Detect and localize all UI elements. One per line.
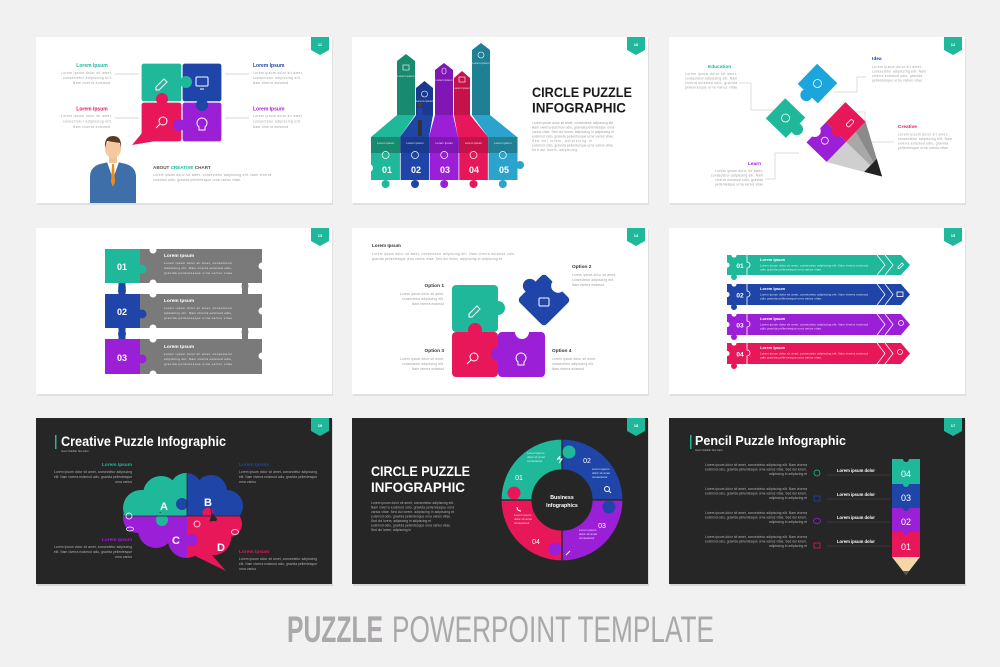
title: Creative Puzzle Infographic: [61, 433, 226, 449]
left labels: Lorem ipsum dolor sit amet,: [61, 71, 112, 75]
arrow rows: odio gravida pellentesque urna varius vitae.: [760, 268, 822, 272]
title: Insert Subtitle Text Here: [61, 449, 89, 453]
slide 3: pencil puzzle: [669, 37, 966, 205]
left labels: Lorem ipsum dolor sit amet,: [61, 114, 112, 118]
pencil: 04: [901, 469, 911, 479]
slide 8: circle puzzle (dark): 18: [634, 423, 639, 428]
arrow rows: 04: [736, 352, 744, 358]
items: euismod odio, gravida pellentesque urna varius vitae. Sed dui lorem,: [705, 516, 807, 520]
labels: [54, 462, 317, 571]
labels: Lorem Ipsum: [102, 537, 132, 543]
title: Insert Subtitle Text Here: [695, 448, 723, 452]
title text: Sed dui lorem, adipiscing in: [532, 139, 592, 143]
right labels: consectetur adipiscing elit.: [253, 120, 301, 124]
items: Lorem ipsum dolor sit amet, consectetur adipiscing elit. Nam viverra: [705, 511, 807, 515]
slide 5: four options puzzle: 14: [634, 233, 639, 238]
numbered puzzle tiles: Lorem ipsum: [436, 141, 453, 145]
slide 6: arrow rows: [669, 228, 966, 396]
ring: consectetur: [579, 536, 595, 540]
ring: consectetur: [527, 459, 543, 463]
ring: 04: [532, 539, 540, 546]
title text: Lorem ipsum dolor sit amet, consectetur adipiscing elit.: [532, 121, 614, 125]
labels: elit. Nam viverra euismod odio, gravida pellentesque: [239, 475, 317, 479]
arrow rows: odio gravida pellentesque urna varius vitae.: [760, 326, 822, 330]
labels: Lorem ipsum dolor sit amet,: [715, 169, 763, 173]
labels: Learn: [748, 161, 761, 167]
arrow columns: [371, 43, 517, 137]
rows: adipiscing elit. Nam viverra euismod odio,: [164, 311, 232, 315]
ring: Lorem ipsum: [527, 451, 545, 455]
header text: Lorem ipsum dolor sit amet, consectetur adipiscing elit. Nam viverra euismod odio,: [372, 252, 515, 256]
rows: 03: [117, 353, 127, 363]
slide 1: square puzzle with person: 11: [318, 42, 323, 47]
title text: INFOGRAPHIC: [532, 100, 626, 116]
slide 4: stacked puzzle rows: [36, 228, 333, 396]
rows: Lorem ipsum dolor sit amet, consectetur: [164, 352, 232, 356]
option labels: Nam viverra euismod: [552, 367, 584, 371]
items: adipiscing in adipiscing et: [769, 544, 807, 548]
right labels: Lorem Ipsum: [253, 63, 285, 69]
items: Lorem ipsum dolor: [837, 468, 875, 473]
header text: [372, 243, 515, 261]
items: Lorem ipsum dolor: [837, 539, 875, 544]
option labels: Lorem ipsum dolor sit amet,: [572, 273, 616, 277]
puzzle pieces: [452, 262, 577, 377]
ring: dolor sit amet: [527, 455, 545, 459]
option labels: Lorem ipsum dolor sit amet,: [552, 357, 596, 361]
labels: consectetur adipiscing elit. Nam: [711, 174, 763, 178]
ring: Infographics: [546, 503, 578, 509]
option labels: Lorem ipsum dolor sit amet,: [400, 292, 444, 296]
ring: 03: [598, 523, 606, 530]
ring: consectetur: [514, 521, 530, 525]
option labels: consectetur adipiscing elit.: [402, 362, 444, 366]
rows: Lorem Ipsum: [164, 298, 194, 304]
labels: Lorem ipsum dolor sit amet, consectetur adipiscing: [239, 557, 317, 561]
right labels: consectetur adipiscing elit.: [253, 76, 301, 80]
ring: Lorem ipsum: [514, 513, 532, 517]
option labels: Lorem ipsum dolor sit amet,: [400, 357, 444, 361]
pencil: 02: [901, 517, 911, 527]
rows: 02: [117, 307, 127, 317]
labels: viverra euismod odio, gravida: [685, 81, 737, 85]
slide 7: creative brain puzzle (dark): [36, 418, 333, 586]
slide 5: four options puzzle: [352, 228, 649, 396]
brain: C: [172, 535, 180, 547]
labels: pellentesque urna varius vitae: [685, 86, 737, 90]
title: CIRCLE PUZZLE: [371, 463, 470, 479]
arrow rows: Lorem Ipsum: [760, 345, 786, 350]
left labels: Lorem Ipsum: [76, 106, 108, 112]
arrow rows: 01: [736, 263, 744, 270]
numbered puzzle tiles: Lorem ipsum: [377, 141, 395, 145]
ring: Lorem ipsum: [592, 467, 610, 471]
rows: adipiscing elit. Nam viverra euismod odio,: [164, 357, 232, 361]
brain: B: [204, 497, 212, 509]
title: Lorem ipsum dolor sit amet, consectetur adipiscing elit.: [371, 501, 454, 505]
slide 2: circle puzzle arrows: [352, 37, 649, 205]
slide 2: circle puzzle arrows: 16: [634, 42, 639, 47]
ring: consectetur: [592, 475, 608, 479]
arrow rows: Lorem ipsum dolor sit amet, consectetur adipiscing elit. Nam viverra euismod: [760, 322, 868, 326]
about text: euismod odio, gravida pellentesque urna varius vitae.: [153, 178, 241, 182]
ring: dolor sit amet: [579, 532, 597, 536]
items: adipiscing in adipiscing et: [769, 496, 807, 500]
title: euismod odio, gravida pellentesque urna varius vitae.: [371, 524, 451, 528]
title text: Nam viverra euismod odio, gravida pellentesque urna: [532, 126, 614, 130]
labels: consectetur adipiscing elit. Nam: [872, 70, 926, 74]
labels: consectetur adipiscing elit. Nam: [685, 76, 737, 80]
rows: [105, 246, 266, 378]
right labels: Lorem Ipsum: [253, 106, 285, 112]
left labels: [61, 63, 139, 129]
left labels: consectetur adipiscing elit.: [63, 76, 112, 80]
slide 9: pencil puzzle (dark): [669, 418, 966, 586]
option labels: consectetur adipiscing elit.: [402, 297, 444, 301]
arrow rows: 03: [736, 322, 744, 330]
numbered puzzle tiles: 03: [440, 165, 450, 175]
bottom title: [287, 609, 714, 650]
numbered puzzle tiles: Lorem ipsum: [465, 141, 483, 145]
option labels: Nam viverra euismod: [412, 367, 444, 371]
items: [705, 463, 890, 548]
arrow rows: 02: [736, 292, 744, 300]
right labels: [225, 63, 303, 129]
items: Lorem ipsum dolor: [837, 492, 875, 497]
ring: dolor sit amet: [592, 471, 610, 475]
option labels: consectetur adipiscing elit.: [552, 362, 594, 366]
about text: Lorem ipsum dolor sit amet, consectetur adipiscing elit. Nam viverra: [153, 173, 271, 177]
rows: gravida pellentesque urna varius vitae: [164, 271, 232, 275]
arrow columns: Lorem ipsum: [416, 99, 434, 103]
about text: [153, 165, 271, 182]
header text: Lorem Ipsum: [372, 243, 401, 248]
rows: gravida pellentesque urna varius vitae: [164, 316, 232, 320]
ring: Business: [550, 495, 574, 501]
labels: pellentesque urna varius vitae: [872, 78, 922, 82]
header text: gravida pellentesque urna varius vitae. Sed dui lorem, adipiscing in adipiscing et: [372, 257, 502, 261]
ring: 01: [515, 475, 523, 482]
arrow rows: Lorem Ipsum: [760, 257, 786, 262]
numbered puzzle tiles: Lorem ipsum: [494, 141, 512, 145]
left labels: consectetur adipiscing elit.: [63, 120, 112, 124]
ring: Lorem ipsum: [579, 528, 597, 532]
small presenter figure: [418, 103, 422, 136]
labels: Lorem ipsum dolor sit amet,: [898, 132, 948, 136]
right labels: Lorem ipsum dolor sit amet,: [253, 114, 303, 118]
rows: Lorem Ipsum: [164, 344, 194, 350]
brain: [123, 473, 243, 571]
option labels: Option 3: [425, 348, 444, 354]
slide 3: pencil puzzle: 12: [951, 42, 956, 47]
arrow rows: Lorem Ipsum: [760, 286, 786, 291]
labels: urna varius: [239, 480, 256, 484]
left labels: Nam viverra euismod: [73, 125, 110, 129]
arrow columns: Lorem ipsum: [472, 61, 490, 65]
right labels: Nam viverra euismod: [253, 81, 288, 85]
title: Sed dui lorem, adipiscing in adipiscing et: [371, 519, 431, 523]
connector lines: [739, 77, 894, 179]
person: [90, 136, 136, 203]
ring: [501, 439, 623, 561]
arrow columns: Lorem ipsum: [453, 86, 471, 90]
labels: consectetur adipiscing elit. Nam: [898, 137, 952, 141]
right labels: Nam viverra euismod: [253, 125, 288, 129]
title: [371, 463, 470, 532]
labels: elit. Nam viverra euismod odio, gravida pellentesque: [54, 550, 132, 554]
slide 1: square puzzle with person: [36, 37, 333, 205]
ring: 02: [583, 458, 591, 465]
arrow rows: Lorem ipsum dolor sit amet, consectetur adipiscing elit. Nam viverra euismod: [760, 352, 868, 356]
labels: Lorem Ipsum: [102, 462, 132, 468]
arrow rows: odio gravida pellentesque urna varius vitae.: [760, 296, 822, 300]
numbered puzzle tiles: 05: [499, 165, 509, 175]
slide 9: pencil puzzle (dark): 17: [951, 423, 956, 428]
title text: [532, 84, 632, 152]
title text: varius vitae. Sed dui lorem, adipiscing in adipiscing et: [532, 130, 614, 134]
items: adipiscing in adipiscing et: [769, 520, 807, 524]
labels: Creative: [898, 124, 917, 130]
labels: Lorem Ipsum: [239, 462, 269, 468]
pencil: [765, 64, 907, 205]
labels: viverra euismod odio, gravida: [872, 74, 922, 78]
title: Sed dui lorem, adipiscing in: [371, 528, 411, 532]
labels: pellentesque urna varius vitae: [715, 182, 763, 186]
arrow columns: Lorem ipsum: [435, 78, 453, 82]
labels: Lorem ipsum dolor sit amet, consectetur adipiscing: [54, 470, 132, 474]
pencil: 03: [901, 493, 911, 503]
labels: Education: [708, 64, 731, 70]
labels: elit. Nam viverra euismod odio, gravida pellentesque: [54, 475, 132, 479]
numbered puzzle tiles: 04: [469, 165, 479, 175]
labels: Lorem ipsum dolor sit amet, consectetur adipiscing: [54, 545, 132, 549]
title text: Sed dui lorem, adipiscing: [532, 148, 577, 152]
items: Lorem ipsum dolor sit amet, consectetur adipiscing elit. Nam viverra: [705, 463, 807, 467]
items: euismod odio, gravida pellentesque urna varius vitae. Sed dui lorem,: [705, 540, 807, 544]
items: euismod odio, gravida pellentesque urna varius vitae. Sed dui lorem,: [705, 468, 807, 472]
slide 7: creative brain puzzle (dark): 19: [318, 423, 323, 428]
numbered puzzle tiles: 02: [411, 165, 421, 175]
items: euismod odio, gravida pellentesque urna varius vitae. Sed dui lorem,: [705, 492, 807, 496]
labels: viverra euismod odio, gravida: [898, 142, 948, 146]
right labels: Lorem ipsum dolor sit amet,: [253, 71, 303, 75]
rows: adipiscing elit. Nam viverra euismod odio,: [164, 266, 232, 270]
title: Pencil Puzzle Infographic: [695, 433, 846, 448]
arrow rows: Lorem ipsum dolor sit amet, consectetur adipiscing elit. Nam viverra euismod: [760, 292, 868, 296]
option labels: consectetur adipiscing elit.: [572, 278, 614, 282]
items: adipiscing in adipiscing et: [769, 472, 807, 476]
labels: Lorem ipsum dolor sit amet,: [685, 72, 737, 76]
left labels: Lorem Ipsum: [76, 63, 108, 69]
labels: Idea: [872, 56, 882, 62]
brain: D: [217, 542, 225, 554]
numbered puzzle tiles: [365, 137, 524, 188]
labels: elit. Nam viverra euismod odio, gravida pellentesque: [239, 562, 317, 566]
title text: CIRCLE PUZZLE: [532, 84, 632, 100]
arrow rows: [724, 252, 910, 369]
arrow rows: odio gravida pellentesque urna varius vitae.: [760, 356, 822, 360]
title: varius vitae. Sed dui lorem, adipiscing in adipiscing et: [371, 510, 454, 514]
title text: euismod odio, gravida pellentesque urna varius vitae.: [532, 134, 614, 138]
items: Lorem ipsum dolor: [837, 515, 875, 520]
labels: urna varius: [115, 480, 132, 484]
items: Lorem ipsum dolor sit amet, consectetur adipiscing elit. Nam viverra: [705, 535, 807, 539]
title: INFOGRAPHIC: [371, 479, 465, 495]
arrow columns: Lorem ipsum: [397, 74, 415, 78]
pencil: 01: [901, 542, 911, 552]
puzzle square: [132, 63, 222, 145]
option labels: Nam viverra euismod: [572, 283, 604, 287]
option labels: Option 1: [425, 283, 444, 289]
option labels: Option 4: [552, 348, 572, 354]
rows: 01: [117, 262, 127, 272]
arrow rows: Lorem Ipsum: [760, 316, 786, 321]
title: Nam viverra euismod odio, gravida pellentesque urna: [371, 506, 454, 510]
labels: viverra euismod odio, gravida: [715, 178, 763, 182]
title: euismod odio, gravida pellentesque urna varius vitae.: [371, 514, 451, 518]
brain: A: [160, 501, 168, 513]
option labels: Nam viverra euismod: [412, 302, 444, 306]
slide 8: circle puzzle (dark): [352, 418, 649, 586]
ring: dolor sit amet: [514, 517, 532, 521]
labels: Lorem ipsum dolor sit amet, consectetur adipiscing: [239, 470, 317, 474]
pencil: [892, 456, 920, 575]
option labels: [400, 264, 616, 371]
arrow rows: Lorem ipsum dolor sit amet, consectetur adipiscing elit. Nam viverra euismod: [760, 264, 868, 268]
labels: urna varius: [115, 555, 132, 559]
items: Lorem ipsum dolor sit amet, consectetur adipiscing elit. Nam viverra: [705, 487, 807, 491]
labels: Lorem ipsum dolor sit amet,: [872, 65, 922, 69]
slide 4: stacked puzzle rows: 13: [318, 233, 323, 238]
about text: ABOUT CREATIVE CHART: [153, 165, 211, 170]
rows: Lorem ipsum dolor sit amet, consectetur: [164, 261, 232, 265]
numbered puzzle tiles: 01: [382, 165, 392, 175]
numbered puzzle tiles: Lorem ipsum: [406, 141, 424, 145]
rows: Lorem Ipsum: [164, 253, 194, 259]
title text: euismod odio, gravida pellentesque urna varius vitae.: [532, 144, 614, 148]
rows: gravida pellentesque urna varius vitae: [164, 362, 232, 366]
slide 6: arrow rows: 15: [951, 233, 956, 238]
bottom title: POWERPOINT TEMPLATE: [392, 609, 714, 650]
labels: urna varius: [239, 567, 256, 571]
labels: Lorem Ipsum: [239, 549, 269, 555]
bottom title: PUZZLE: [287, 609, 383, 650]
rows: Lorem ipsum dolor sit amet, consectetur: [164, 306, 232, 310]
labels: [685, 56, 952, 186]
labels: pellentesque urna varius vitae: [898, 146, 948, 150]
option labels: Option 2: [572, 264, 592, 270]
left labels: Nam viverra euismod: [73, 81, 110, 85]
